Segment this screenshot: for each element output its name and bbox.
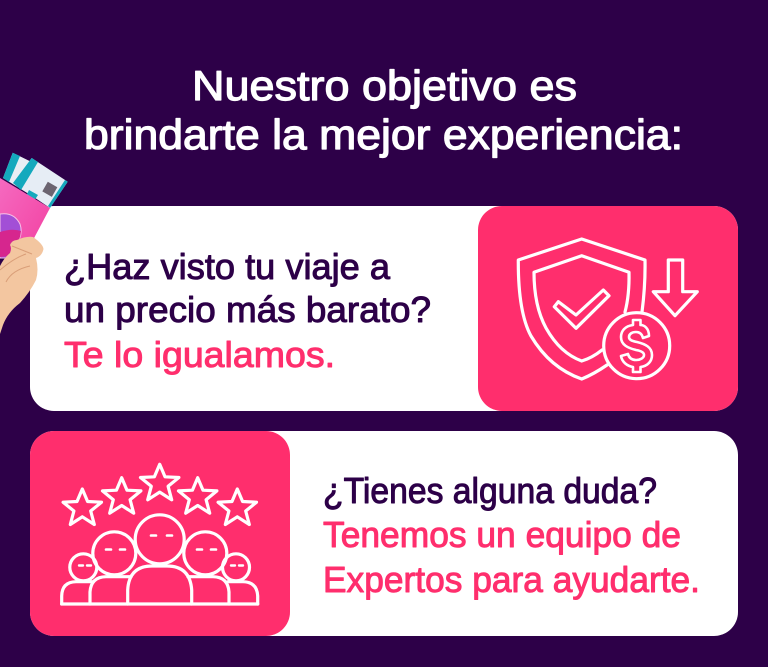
card background [30,206,738,411]
icon: shield [518,239,645,379]
icon: five stars [63,464,256,524]
answer text: Tenemos un equipo de [323,514,681,555]
answer text: Expertos para ayudarte. [323,559,700,600]
title [84,62,683,158]
question text: ¿Haz visto tu viaje a [64,246,391,287]
icon panel: people and stars [30,431,290,636]
panel: expert team [30,431,738,636]
pink folder [0,178,50,258]
front ticket [13,158,68,208]
hand holding tickets [0,153,68,334]
icon: dollar coin [604,313,670,379]
title: Nuestro objetivo es [192,62,577,109]
folder logo [0,214,21,258]
answer text [323,470,700,600]
answer text: ¿Tienes alguna duda? [323,470,657,511]
hand [0,237,44,334]
icon: down arrow [653,260,697,316]
back ticket [3,153,52,196]
icon: group of people [62,515,258,604]
title: brindarte la mejor experiencia: [84,111,683,158]
question text: un precio más barato? [64,289,431,330]
question text [64,246,431,375]
icon panel: shield with price down [478,206,738,411]
card background [30,431,738,636]
question text: Te lo igualamos. [64,334,335,375]
panel: price match [30,206,738,411]
